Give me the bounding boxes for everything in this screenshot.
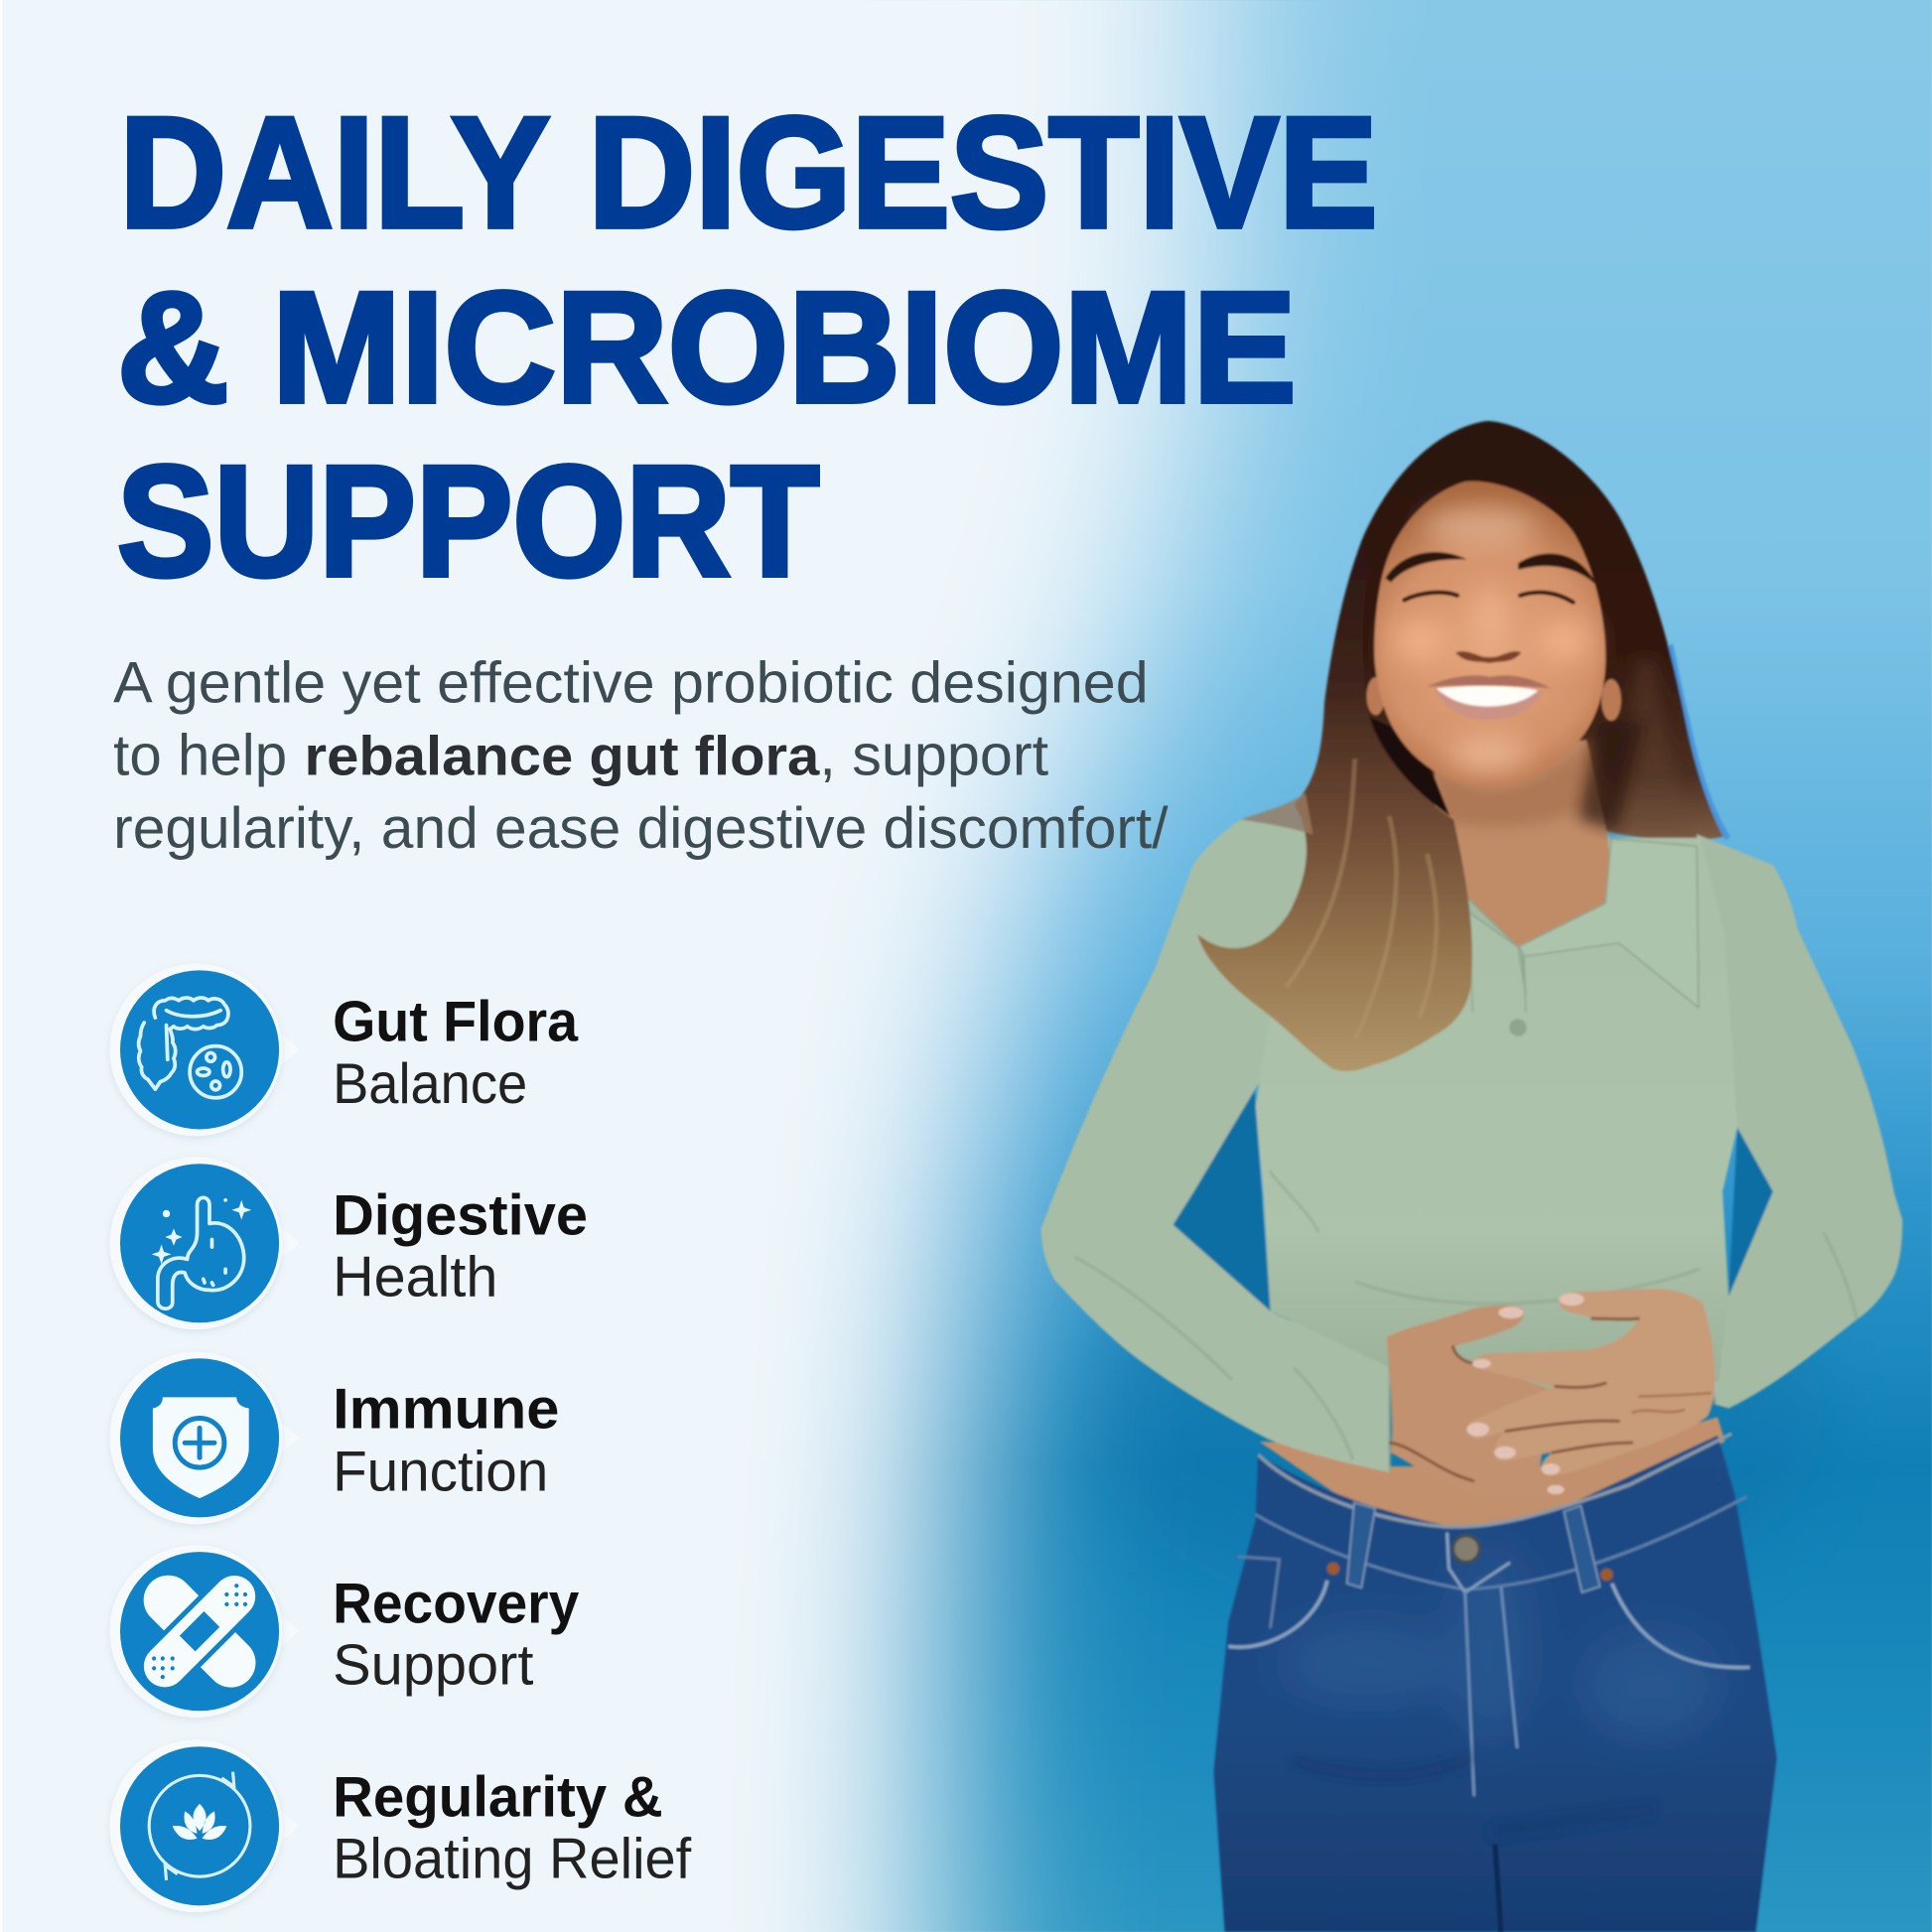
left collar: [1424, 873, 1526, 995]
hands: [1387, 1289, 1715, 1499]
badge ring and circle: [109, 1157, 300, 1329]
benefit: digestive health: [109, 1157, 588, 1329]
eyes: [1404, 593, 1574, 603]
right collar: [1518, 839, 1699, 1008]
icon: intestine and bacteria: [139, 998, 241, 1098]
hair strands: [1287, 759, 1437, 1039]
eyebrows: [1385, 552, 1597, 586]
label: Bloating Relief: [333, 1827, 691, 1890]
smile: [1427, 675, 1551, 720]
intro paragraph: rebalance gut flora: [305, 725, 820, 787]
icon: crossed bandages: [129, 1561, 270, 1702]
label: Immune: [333, 1377, 559, 1441]
face highlights: [1393, 508, 1590, 770]
label: [333, 1572, 580, 1698]
badge ring and circle: [109, 1545, 300, 1718]
label: [333, 1765, 691, 1890]
icon: shield with plus: [153, 1397, 249, 1498]
icon: circular arrows with lotus: [149, 1772, 250, 1880]
left arm: [1041, 819, 1390, 1472]
label: [333, 1184, 588, 1310]
intro paragraph: [113, 650, 1169, 861]
intro paragraph: , support: [819, 724, 1048, 788]
icon: stomach with sparkles: [152, 1197, 251, 1309]
benefit: regularity and bloating relief: [109, 1739, 691, 1912]
torso: [1256, 838, 1737, 1442]
title: & MICROBIOME: [117, 259, 1297, 436]
neck: [1435, 740, 1610, 951]
benefit: recovery support: [109, 1545, 580, 1718]
title: SUPPORT: [117, 433, 819, 610]
sleeve and torso folds: [1074, 1171, 1857, 1472]
label: Recovery: [333, 1572, 580, 1635]
thin hair over shoulder: [1241, 793, 1313, 835]
benefit: immune function: [109, 1351, 559, 1524]
intro paragraph: to help: [113, 724, 287, 788]
label: Balance: [333, 1052, 527, 1116]
label: Digestive: [333, 1184, 588, 1248]
title: DAILY DIGESTIVE: [119, 83, 1378, 260]
label: Regularity &: [333, 1765, 663, 1829]
title: [117, 83, 1378, 610]
placket: [1468, 910, 1526, 1013]
jeans: [1213, 1436, 1777, 1932]
label: Function: [333, 1441, 548, 1504]
neck, collar and head: [1197, 482, 1699, 1071]
intro paragraph: A gentle yet effective probiotic designed: [113, 650, 1149, 715]
belly skin: [1259, 1417, 1725, 1530]
benefit: gut flora balance: [109, 964, 579, 1136]
intro paragraph: regularity, and ease digestive discomfort/: [113, 796, 1169, 861]
label: [333, 1377, 559, 1504]
hair behind shoulders: [1343, 421, 1727, 840]
jeans details: [1228, 1434, 1749, 1932]
face: [1374, 482, 1605, 787]
label: Support: [333, 1634, 534, 1698]
left front hair: [1197, 538, 1472, 1071]
shirt button: [1509, 1019, 1527, 1036]
badge ring and circle: [109, 1351, 300, 1524]
right arm: [1697, 834, 1902, 1409]
nose shadow: [1455, 651, 1521, 663]
label: [333, 991, 579, 1116]
ears: [1367, 677, 1385, 715]
person photo: smiling woman holding stomach: [1041, 421, 1902, 1932]
label: Gut Flora: [333, 991, 579, 1054]
jeans button and rivets: [1327, 1535, 1613, 1581]
label: Health: [333, 1246, 497, 1310]
jeans denim highlights: [1282, 1553, 1719, 1749]
badge ring and circle: [109, 1739, 300, 1912]
gap shadows between arms and torso: [1173, 1084, 1773, 1313]
badge ring and circle: [109, 964, 300, 1136]
